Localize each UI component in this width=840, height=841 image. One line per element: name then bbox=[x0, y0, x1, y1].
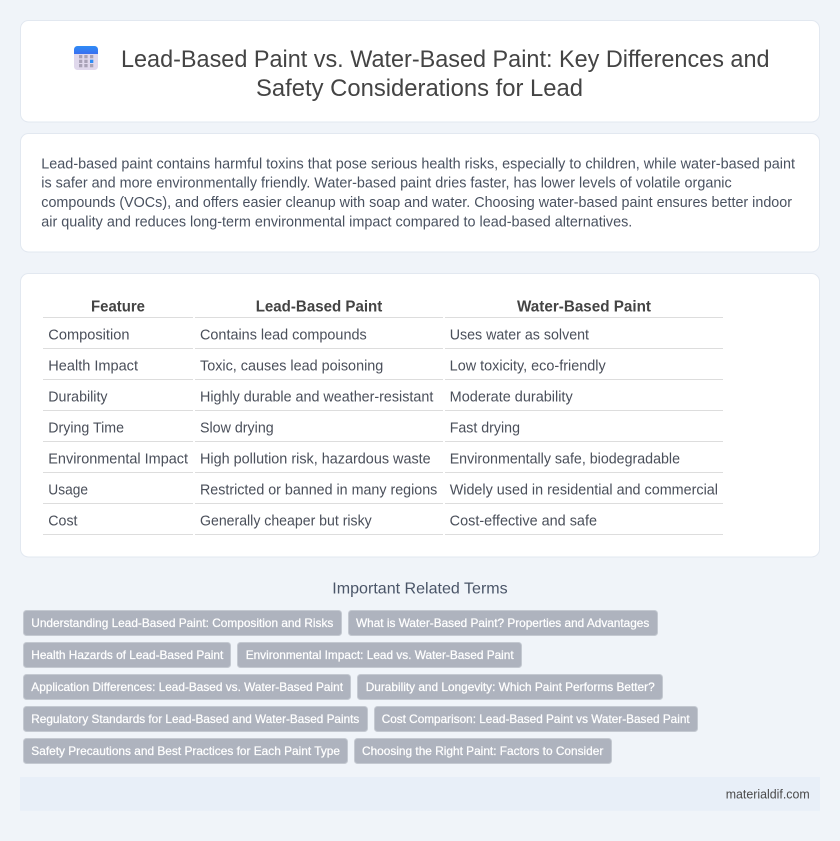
table row: health impact: Toxic, causes lead poisoning bbox=[200, 358, 383, 374]
table header row: Water-Based Paint bbox=[517, 299, 652, 316]
table row: composition: Composition bbox=[48, 327, 129, 343]
tag: cost comparison bbox=[374, 706, 698, 732]
tag: health hazards bbox=[24, 642, 230, 668]
table row: health impact: Health Impact bbox=[48, 358, 138, 374]
tag: environmental impact: Environmental Impact: Lead vs. Water-Based Paint bbox=[246, 648, 514, 662]
tag: choosing the right paint bbox=[354, 738, 612, 764]
tag: choosing the right paint: Choosing the Right Paint: Factors to Consider bbox=[362, 744, 603, 758]
table row: usage: Restricted or banned in many regions bbox=[200, 482, 437, 498]
tag: safety precautions: Safety Precautions and Best Practices for Each Paint Type bbox=[31, 744, 340, 758]
table row: durability: Durability bbox=[48, 389, 108, 405]
tag: understanding lead-based paint bbox=[24, 610, 342, 636]
text block: introduction paragraph: Lead-based paint contains harmful toxins that pose serious health risks, especially to children, while water-based paint bbox=[41, 156, 795, 172]
tag: durability and longevity bbox=[358, 674, 662, 700]
tag: durability and longevity: Durability and Longevity: Which Paint Performs Better? bbox=[366, 680, 655, 694]
table row: drying time: Drying Time bbox=[48, 420, 124, 436]
table row: drying time: Slow drying bbox=[200, 420, 274, 436]
table row: usage: Widely used in residential and commercial bbox=[450, 482, 718, 498]
table row: cost bbox=[43, 513, 723, 535]
text block: introduction paragraph: air quality and reduces long-term environmental impact compared to lead-based alternatives. bbox=[41, 214, 632, 230]
table row: composition: Contains lead compounds bbox=[200, 327, 367, 343]
table row: environmental impact: Environmentally safe, biodegradable bbox=[450, 451, 680, 467]
table row: durability: Moderate durability bbox=[450, 389, 574, 405]
table header row: Feature bbox=[91, 299, 145, 316]
tag: application differences: Application Differences: Lead-Based vs. Water-Based Paint bbox=[31, 680, 344, 694]
table row: composition bbox=[43, 327, 723, 349]
table row: durability bbox=[43, 389, 723, 411]
tag: understanding lead-based paint: Understanding Lead-Based Paint: Composition and Risks bbox=[31, 616, 333, 630]
tag: regulatory standards bbox=[24, 706, 368, 732]
table row: usage: Usage bbox=[48, 482, 88, 498]
table header row: Lead-Based Paint bbox=[256, 299, 383, 316]
title: Safety Considerations for Lead bbox=[256, 75, 583, 102]
table row: health impact: Low toxicity, eco-friendly bbox=[450, 358, 606, 374]
table row: drying time bbox=[43, 420, 723, 442]
text block: introduction paragraph bbox=[41, 156, 795, 230]
panel: header bbox=[20, 20, 820, 122]
title bbox=[121, 46, 770, 102]
panel: related term tags bbox=[24, 610, 698, 764]
table row: environmental impact: High pollution risk, hazardous waste bbox=[200, 451, 431, 467]
icon: calendar bbox=[74, 46, 98, 70]
text block: introduction paragraph: compounds (VOCs), and offers easier cleanup with soap and water. Choosing water-based paint ensures better indoor bbox=[41, 195, 792, 211]
table row: durability: Highly durable and weather-resistant bbox=[200, 389, 433, 405]
table header row bbox=[43, 299, 723, 318]
panel: introduction bbox=[20, 134, 820, 252]
table row: cost: Cost-effective and safe bbox=[450, 513, 597, 529]
table row: drying time: Fast drying bbox=[450, 420, 520, 436]
tag: cost comparison: Cost Comparison: Lead-Based Paint vs Water-Based Paint bbox=[382, 712, 690, 726]
table row: environmental impact bbox=[43, 451, 723, 473]
tag: application differences bbox=[24, 674, 350, 700]
tag: environmental impact bbox=[238, 642, 522, 668]
panel: comparison table bbox=[20, 274, 820, 557]
footer: materialdif.com bbox=[726, 786, 810, 801]
tag: what is water-based paint: What is Water-Based Paint? Properties and Advantages bbox=[356, 616, 649, 630]
table row: cost: Cost bbox=[48, 513, 78, 529]
table row: cost: Generally cheaper but risky bbox=[200, 513, 372, 529]
tag: safety precautions bbox=[24, 738, 348, 764]
tag: what is water-based paint bbox=[348, 610, 658, 636]
tag: health hazards: Health Hazards of Lead-Based Paint bbox=[31, 648, 224, 662]
tag: regulatory standards: Regulatory Standards for Lead-Based and Water-Based Paints bbox=[31, 712, 359, 726]
heading: important related terms: Important Related Terms bbox=[332, 580, 508, 597]
table row: health impact bbox=[43, 358, 723, 380]
table row: composition: Uses water as solvent bbox=[450, 327, 589, 343]
table row: environmental impact: Environmental Impact bbox=[48, 451, 188, 467]
title: Lead-Based Paint vs. Water-Based Paint: Key Differences and bbox=[121, 46, 770, 73]
text block: introduction paragraph: is safer and more environmentally friendly. Water-based paint dries faster, has lower levels of volatile organic bbox=[41, 176, 732, 192]
footer bbox=[20, 777, 820, 811]
table row: usage bbox=[43, 482, 723, 504]
